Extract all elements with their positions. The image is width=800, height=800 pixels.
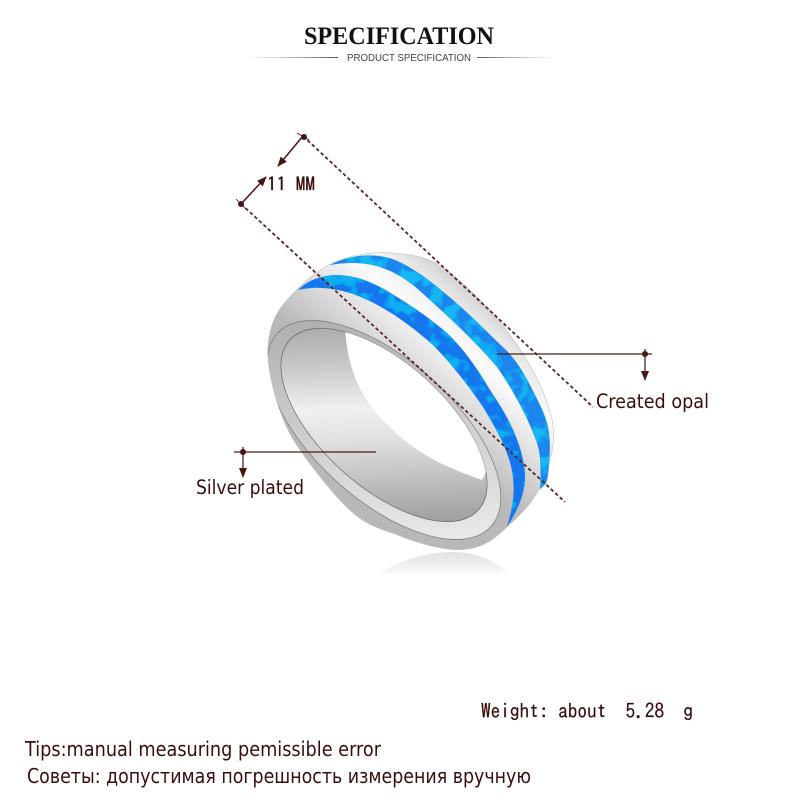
opal stripe lower bbox=[298, 275, 525, 527]
callout: created opal: Created opal bbox=[596, 390, 709, 413]
callout: silver plated: Silver plated bbox=[196, 476, 304, 499]
weight: Weight: about 5.28 g bbox=[481, 701, 693, 721]
dimension label: 11 MM bbox=[267, 175, 315, 194]
title: SPECIFICATION bbox=[304, 23, 494, 50]
tips russian: Советы: допустимая погрешность измерения вручную bbox=[27, 764, 531, 788]
ring hole bbox=[345, 332, 486, 480]
dimension arrow top bbox=[278, 133, 309, 166]
tips english: Tips:manual measuring pemissible error bbox=[24, 737, 381, 761]
callout: silver plated bbox=[196, 447, 376, 499]
dimension guide lines bbox=[241, 136, 593, 502]
ring reflection bbox=[380, 552, 507, 573]
ring illustration bbox=[268, 252, 554, 550]
front rim bevel bbox=[268, 320, 502, 540]
callout: created opal bbox=[497, 349, 709, 413]
dimension arrow bottom bbox=[236, 177, 266, 209]
subtitle: PRODUCT SPECIFICATION bbox=[347, 53, 471, 64]
inner surface of band bbox=[248, 294, 520, 556]
ring outer silhouette bbox=[268, 253, 554, 550]
opal stripe upper bbox=[330, 255, 550, 490]
